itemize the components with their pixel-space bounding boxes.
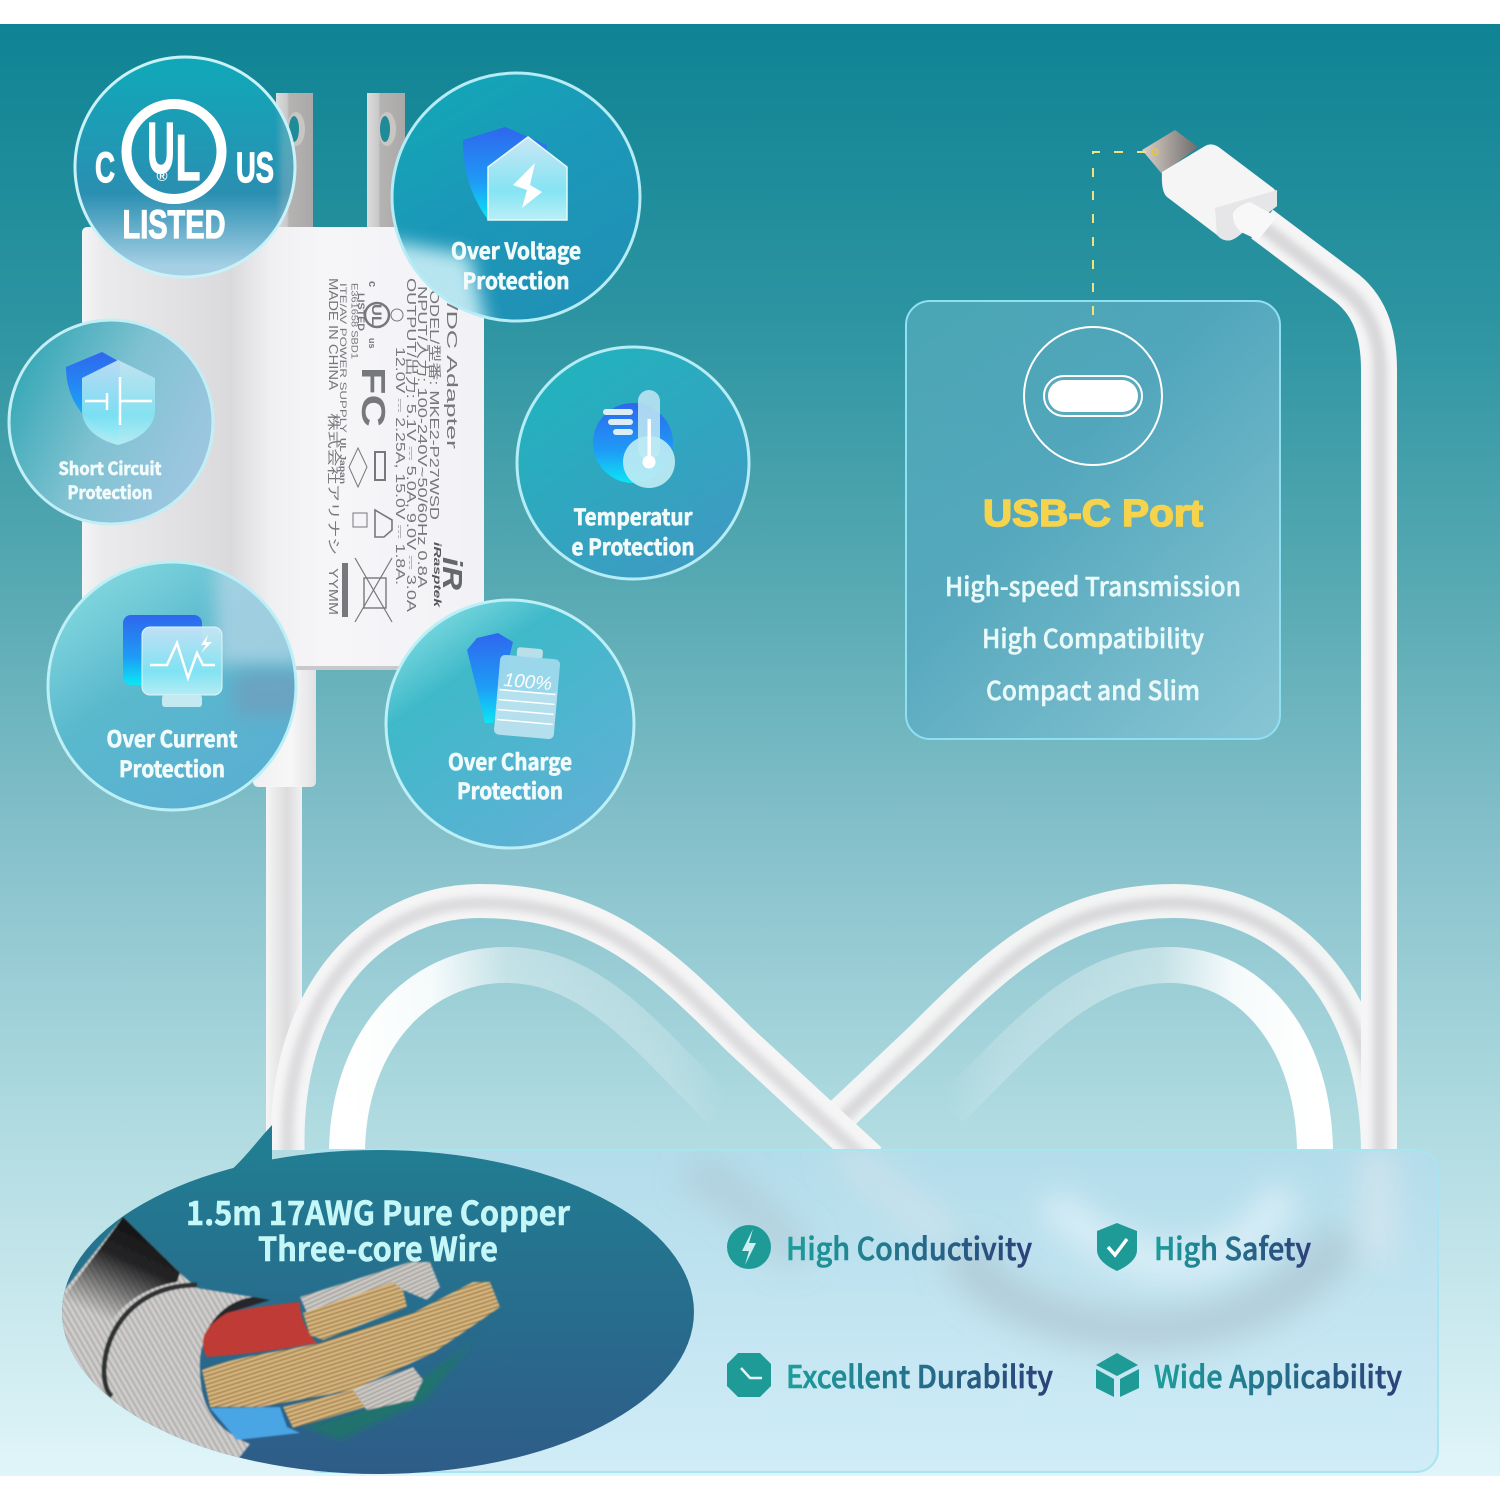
UL logo: LISTED — [122, 203, 226, 247]
adapter printed text: ITE/AV POWER SUPPLY — [338, 283, 348, 433]
adapter regulatory marks: LISTED — [356, 293, 366, 332]
callout heading: 1.5m 17AWG Pure Copper — [186, 1187, 571, 1235]
adapter body — [82, 227, 484, 670]
left inner glow arc — [347, 965, 720, 1160]
adapter printed text: iR — [437, 557, 468, 591]
badge: over charge: Protection — [457, 774, 563, 806]
copper wire illustration — [62, 1216, 501, 1458]
badge: over charge — [386, 600, 634, 848]
feature: wide applicability: Wide Applicability — [1154, 1352, 1402, 1397]
feature: high conductivity: High Conductivity — [786, 1224, 1032, 1269]
adapter printed text: /DC Adapter — [443, 303, 460, 449]
feature: high safety — [1097, 1223, 1311, 1271]
adapter printed text: MADE IN CHINA — [326, 278, 341, 390]
badge: over current: Over Current — [106, 722, 238, 754]
jacket opening shadow — [208, 1296, 270, 1329]
USB-C features text — [945, 567, 1241, 708]
metal tip — [1142, 130, 1198, 174]
adapter printed text: E361658 SBD1 — [350, 283, 360, 359]
adapter printed text: UL Japan — [338, 438, 347, 484]
callout: copper wire — [40, 1125, 694, 1480]
icon: bolt — [727, 1225, 771, 1269]
icon: shield circuit — [66, 352, 155, 445]
panel: cable features — [300, 1150, 1438, 1472]
badge: short circuit: Short Circuit — [58, 455, 162, 481]
copper strand upper — [303, 1282, 407, 1340]
USB-C features text: High Compatibility — [982, 619, 1204, 656]
left vertical cable — [266, 780, 302, 1160]
adapter printed text: 12.0V ⎓ 2.25A, 15.0V ⎓ 1.8A. — [393, 347, 408, 585]
UL logo: C — [95, 144, 115, 192]
badge: over voltage: Over Voltage — [451, 234, 581, 266]
icon: thermometer — [593, 390, 675, 488]
USB-C connector — [1142, 130, 1277, 241]
wire shadow — [305, 1347, 467, 1441]
USB-C features text: High-speed Transmission — [945, 567, 1241, 604]
badge: short circuit — [9, 320, 213, 524]
badge: short circuit: Protection — [68, 479, 152, 505]
silver strand lower — [350, 1367, 423, 1410]
UL logo: U — [147, 109, 175, 189]
badge: over charge: Over Charge — [448, 745, 572, 777]
adapter printed text: iRasptek — [431, 542, 442, 608]
right loop cable — [830, 901, 1378, 1160]
UL logo — [95, 104, 274, 247]
adapter printed text: ODEL/型番: MKE2-P27WSD — [427, 290, 442, 520]
UL logo: US — [236, 144, 274, 192]
adapter printed text — [326, 278, 468, 615]
red core — [203, 1302, 317, 1357]
icon: shield check — [1097, 1223, 1137, 1271]
plug prongs — [276, 93, 405, 233]
adapter printed text: 株式会社アリナシ — [326, 413, 341, 555]
feature: excellent durability: Excellent Durability — [786, 1352, 1053, 1397]
connector body — [1162, 144, 1277, 241]
icon: shield house bolt — [463, 127, 567, 220]
silver strand upper — [300, 1262, 440, 1320]
icon: battery: 100% — [503, 670, 553, 695]
icon: battery — [467, 633, 561, 739]
dashed callout line — [1093, 149, 1158, 326]
badge: over voltage — [385, 73, 640, 340]
adapter regulatory marks: us — [367, 338, 377, 349]
adapter printed text: NPUT/入力: 100-240V~50/60Hz 0.8A — [415, 286, 430, 588]
icon: monitor pulse — [123, 615, 222, 707]
adapter regulatory marks: c — [366, 281, 378, 287]
callout bubble — [229, 1125, 272, 1172]
adapter regulatory marks: UL — [369, 304, 385, 327]
outer jacket — [62, 1216, 253, 1458]
collar — [1233, 202, 1277, 240]
copper strand big — [202, 1282, 500, 1407]
right vertical cable to connector — [1262, 224, 1380, 1160]
badge: temperature — [517, 347, 749, 579]
badge: over voltage: Protection — [462, 264, 570, 296]
UL logo: ® — [156, 168, 168, 185]
blue core — [210, 1407, 300, 1440]
callout heading: Three-core Wire — [258, 1223, 498, 1271]
left loop cable — [288, 901, 870, 1162]
right inner glow arc — [950, 965, 1315, 1160]
USB-C features text: Compact and Slim — [986, 671, 1200, 708]
badge: UL listed — [75, 57, 320, 277]
jacket band — [104, 1285, 197, 1396]
icon: cube — [1096, 1353, 1139, 1397]
port icon circle — [1024, 327, 1162, 465]
adapter stem — [253, 660, 316, 787]
callout heading — [186, 1187, 571, 1271]
copper strand lower — [283, 1390, 365, 1428]
badge: over current — [48, 560, 305, 810]
icon: clock octagon — [727, 1353, 771, 1397]
badge: temperature: e Protection — [572, 530, 694, 562]
adapter regulatory marks — [342, 281, 403, 622]
adapter regulatory marks: FC — [355, 367, 392, 427]
badge: temperature: Temperatur — [574, 500, 693, 532]
feature: high safety: High Safety — [1154, 1224, 1311, 1269]
adapter — [82, 93, 484, 787]
badge: over current: Protection — [119, 752, 225, 784]
USB-C heading: USB-C Port — [983, 493, 1203, 535]
adapter printed text: OUTPUT/出力: 5.1V ⎓ 5.0A, 9.0V ⎓ 3.0A — [404, 278, 419, 612]
adapter printed text: YYMM — [326, 568, 341, 615]
panel: USB-C port — [906, 301, 1280, 739]
white cable loops — [266, 224, 1380, 1162]
UL logo: L — [176, 121, 200, 194]
black sleeve — [66, 1216, 181, 1319]
